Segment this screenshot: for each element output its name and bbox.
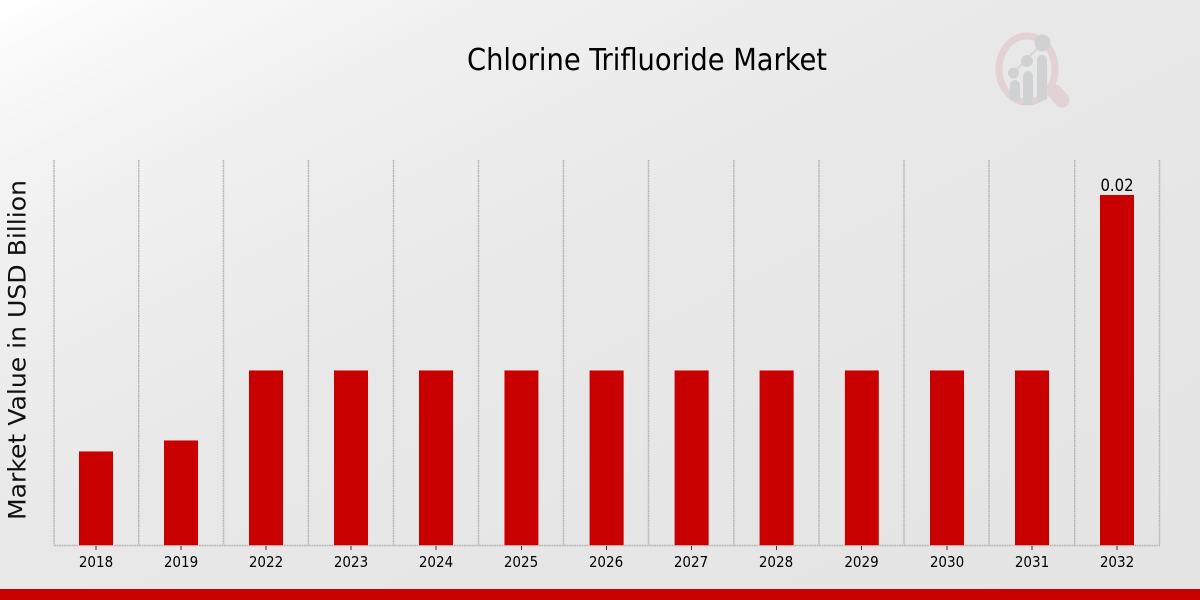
value label: 0.02 [1100,176,1134,195]
x axis labels: 2028 [759,553,793,571]
x axis labels: 2029 [844,553,879,571]
bar 2019 [164,440,198,546]
footer bar [0,589,1200,600]
title: Chlorine Trifluoride Market [467,43,827,78]
bar 2018 [79,451,113,546]
x axis labels: 2024 [419,553,453,571]
bar chart [79,195,1134,546]
bar 2022 [249,370,283,546]
x axis labels: 2032 [1100,553,1134,571]
x axis labels [79,553,1134,571]
x axis labels: 2027 [674,553,708,571]
bar 2023 [334,370,368,546]
x axis labels: 2030 [930,553,964,571]
y axis title: Market Value in USD Billion [4,180,32,520]
icon: magnifier logo watermark [999,34,1062,105]
bar 2027 [674,370,709,546]
x axis labels: 2022 [249,553,283,571]
bar 2026 [589,370,624,546]
bar 2025 [504,370,539,546]
bar 2031 [1015,370,1049,546]
x axis labels: 2018 [79,553,113,571]
x axis labels: 2023 [334,553,368,571]
bar 2030 [930,370,964,546]
bar 2028 [759,370,794,546]
x axis labels: 2025 [504,553,538,571]
x axis ticks [96,546,1117,550]
bar 2024 [419,370,453,546]
bar 2032 [1100,195,1134,546]
bar 2029 [845,370,879,546]
x axis labels: 2031 [1015,553,1049,571]
x axis labels: 2019 [164,553,198,571]
x axis labels: 2026 [589,553,623,571]
